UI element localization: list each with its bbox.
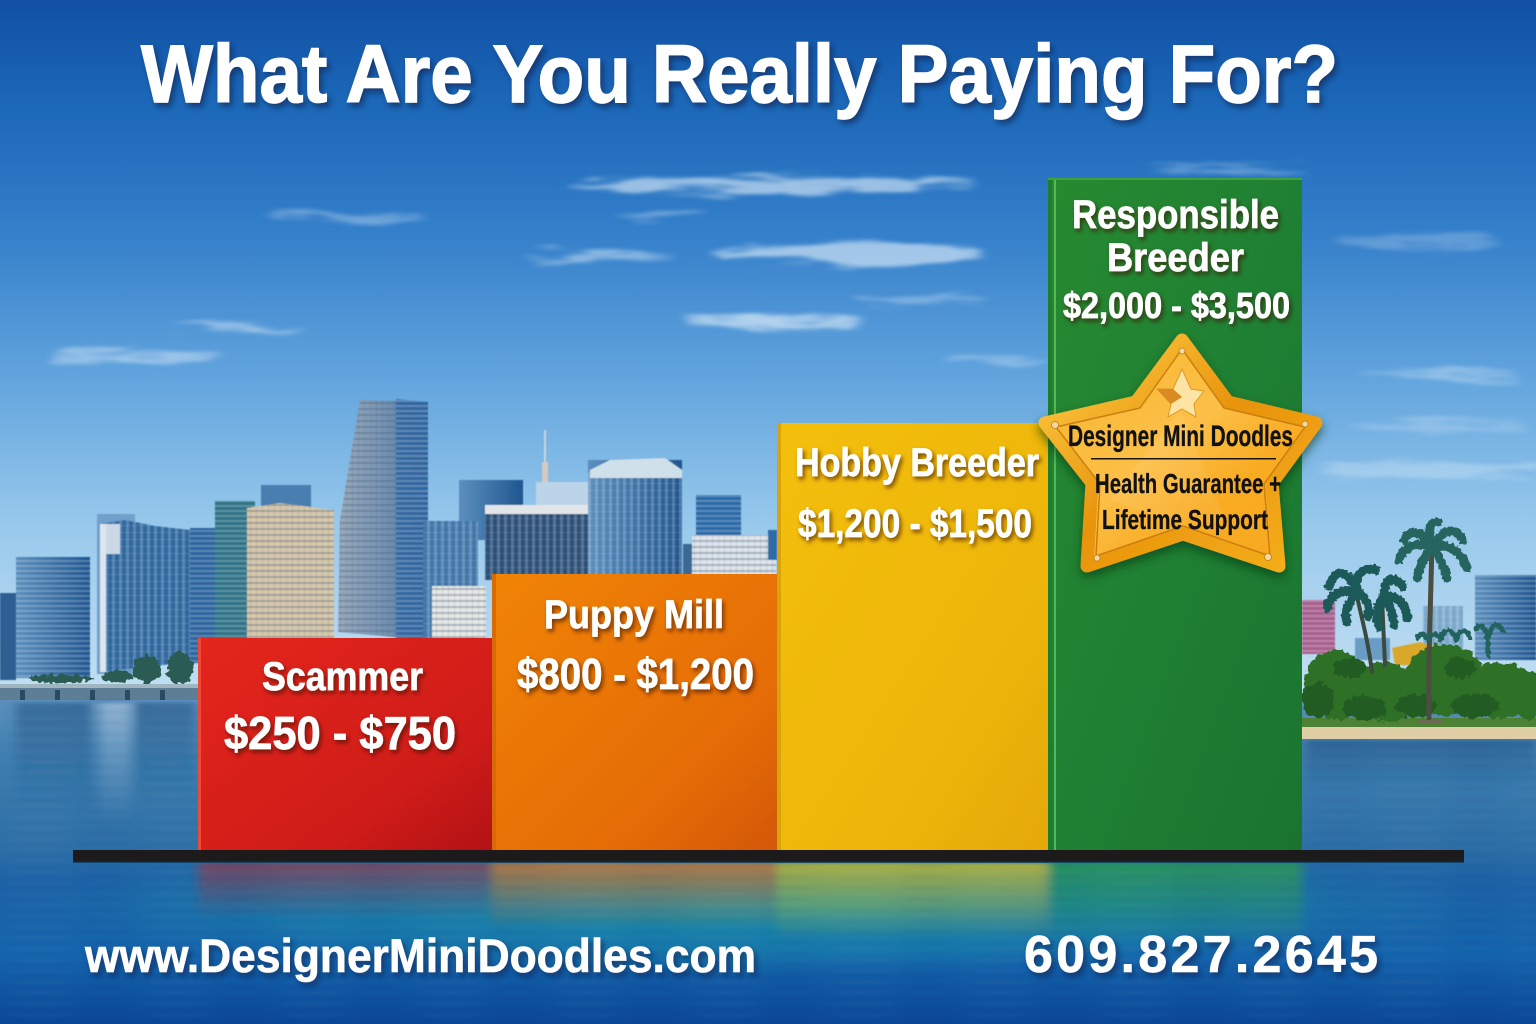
water xyxy=(0,700,1536,1024)
label: Hobby Breeder: Hobby Breeder xyxy=(795,441,1039,485)
star badge xyxy=(1045,340,1316,566)
bar: Hobby Breeder xyxy=(777,423,1048,850)
label line 2: Breeder xyxy=(1107,236,1244,280)
skyline: right buildings xyxy=(1302,575,1536,665)
bar: Puppy Mill xyxy=(492,574,777,850)
price: Responsible Breeder: $2,000 - $3,500 xyxy=(1063,285,1290,326)
palm trees xyxy=(1327,522,1503,722)
bar: Scammer xyxy=(198,638,493,850)
icon: small star xyxy=(1157,369,1204,417)
title: What Are You Really Paying For? xyxy=(141,29,1338,120)
label: Responsible Breeder: Responsible xyxy=(1072,193,1279,237)
skyline: left shoreline trees and bridge xyxy=(0,652,198,701)
clouds xyxy=(50,167,1536,479)
label: Puppy Mill: Puppy Mill xyxy=(544,593,724,637)
label: Scammer: Scammer xyxy=(262,655,423,699)
website: www.DesignerMiniDoodles.com xyxy=(84,929,756,982)
water reflections xyxy=(0,700,1536,1024)
badge text: Health Guarantee +: Health Guarantee + xyxy=(1095,468,1281,499)
background: sky xyxy=(0,0,1536,700)
badge text: Designer Mini Doodles: Designer Mini Doodles xyxy=(1068,420,1293,453)
right shore: trees and sand xyxy=(1302,644,1536,739)
price: Puppy Mill: $800 - $1,200 xyxy=(517,650,754,699)
price: Hobby Breeder: $1,200 - $1,500 xyxy=(798,502,1032,546)
chart baseline xyxy=(73,850,1464,863)
price: Scammer: $250 - $750 xyxy=(224,707,456,759)
bar: Responsible Breeder xyxy=(1048,178,1302,850)
skyline: left city buildings xyxy=(0,399,777,680)
badge text: Lifetime Support: Lifetime Support xyxy=(1102,504,1268,535)
phone number: 609.827.2645 xyxy=(1024,926,1378,984)
